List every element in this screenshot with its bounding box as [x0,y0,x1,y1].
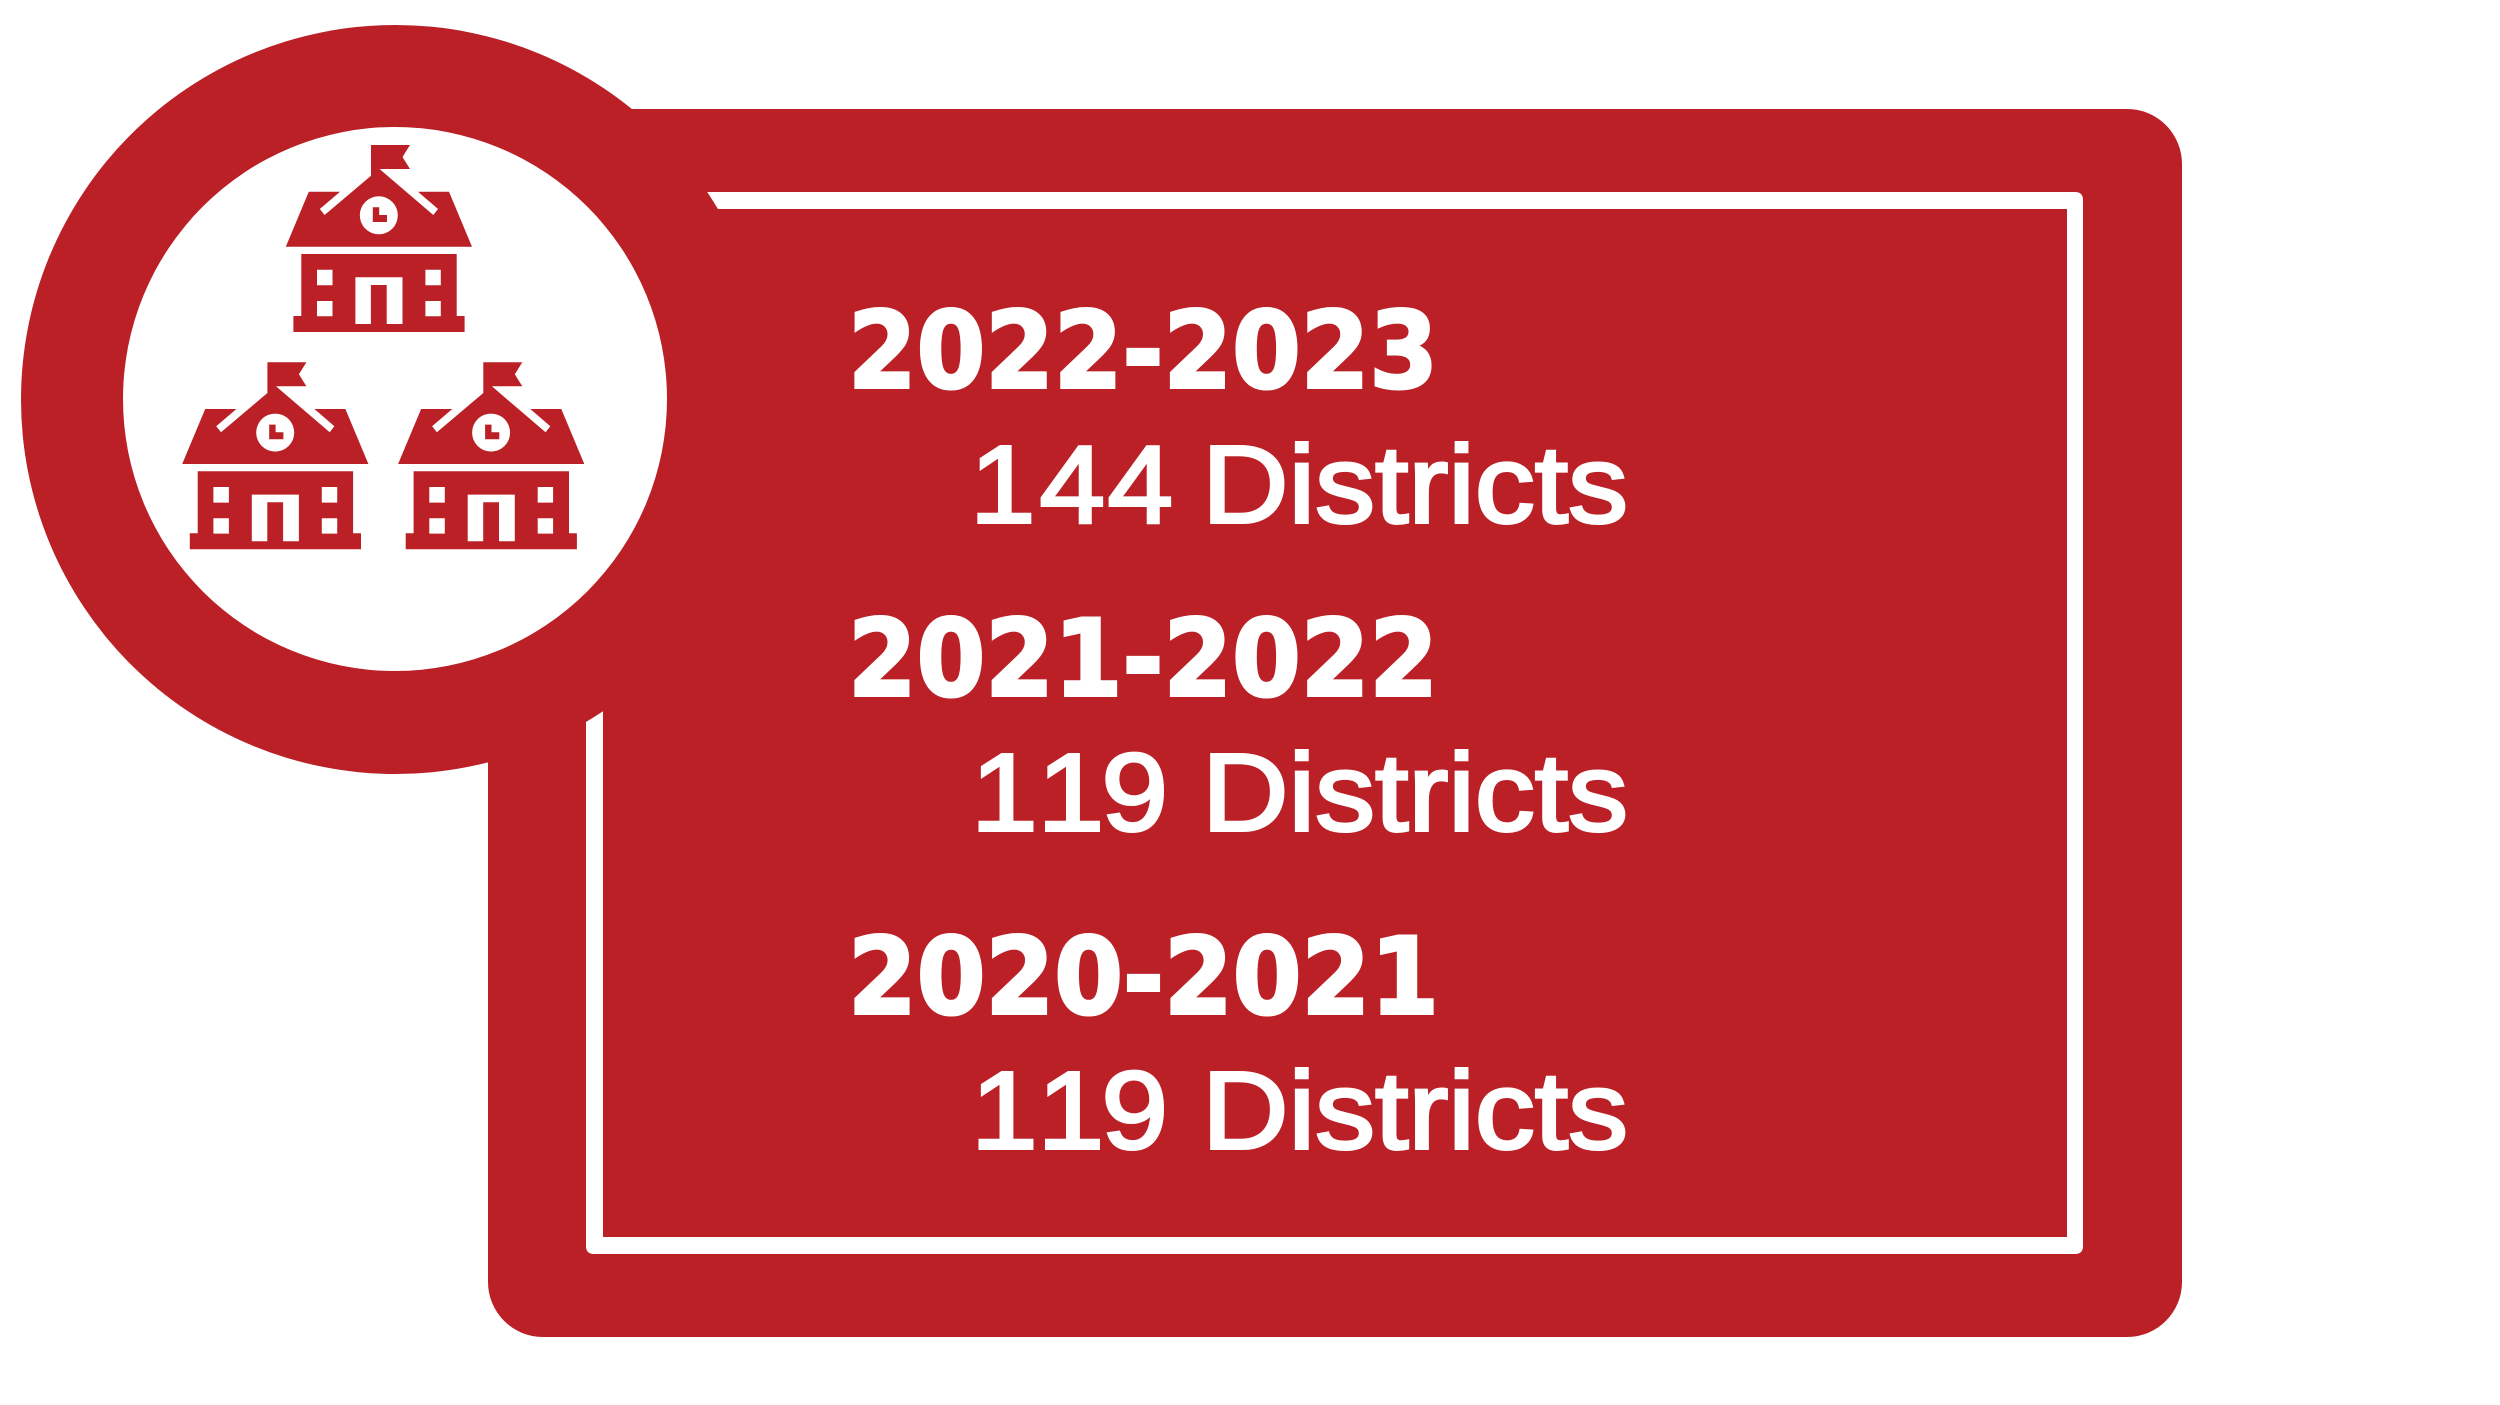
white inner frame [586,192,2083,1254]
year label 2022-2023: 2022-2023 [848,290,1438,412]
district count 119 (2020-2021): Districts [1202,1050,1628,1172]
panel: red rounded rectangle [488,109,2182,1337]
icon: school top [286,145,472,332]
district count 144: Districts [1202,424,1628,546]
district count 119 (2021-2022): Districts [1202,732,1628,854]
district count 144 [970,424,1628,547]
district count 119 (2020-2021): 119 [971,1050,1168,1172]
district count 119 (2021-2022) [971,732,1628,854]
red circle badge with school icons [21,25,770,774]
district count 119 (2020-2021) [971,1050,1628,1172]
year label 2021-2022: 2021-2022 [848,598,1438,720]
district count 119 (2021-2022): 119 [971,732,1168,854]
year label 2020-2021: 2020-2021 [848,916,1439,1038]
icon: school bottom right [398,362,584,549]
icon: school bottom left [182,362,368,549]
district count 144: 144 [970,424,1173,547]
